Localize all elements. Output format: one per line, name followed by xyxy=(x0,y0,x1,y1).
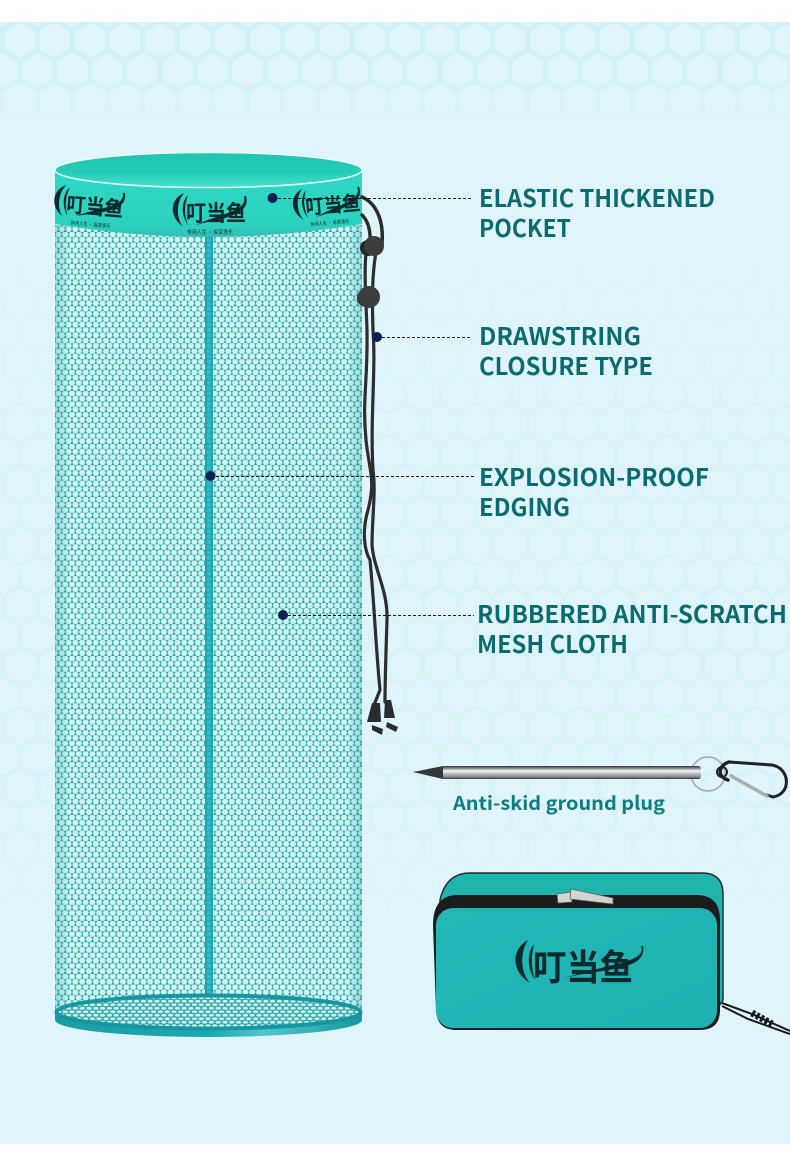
logo: left: 休闲人生 · 纵享渔乐 xyxy=(70,218,111,230)
cord end 1 xyxy=(367,703,383,735)
explosion-proof edging strip xyxy=(205,236,213,996)
carabiner xyxy=(717,762,786,797)
callout: rubbered anti-scratch mesh cloth xyxy=(278,595,787,660)
callout: elastic thickened pocket: ELASTIC THICKENED xyxy=(479,179,715,214)
logo: right: 叮当鱼 xyxy=(304,187,362,221)
elastic thickened band xyxy=(55,152,362,237)
callout: rubbered anti-scratch mesh cloth: MESH CLOTH xyxy=(477,625,628,660)
bottom hoop xyxy=(55,996,362,1037)
logo: center xyxy=(173,193,247,236)
callout: elastic thickened pocket xyxy=(268,179,715,244)
case front panel xyxy=(436,908,717,1028)
bottom white margin xyxy=(0,1144,790,1166)
cord toggle 1 xyxy=(360,236,384,256)
carrying case xyxy=(433,873,790,1034)
callout: drawstring closure type: DRAWSTRING xyxy=(479,317,641,352)
split ring xyxy=(691,757,725,791)
cord end 2 xyxy=(384,700,398,732)
callout: drawstring closure type: CLOSURE TYPE xyxy=(479,347,653,382)
zipper pull xyxy=(557,889,613,904)
mesh body xyxy=(55,225,362,1015)
logo: left xyxy=(52,184,126,231)
callout: drawstring closure type xyxy=(372,317,653,382)
logo: right xyxy=(292,184,363,230)
cord toggle 2 xyxy=(357,286,380,308)
logo: right: 休闲人生 · 纵享渔乐 xyxy=(310,218,349,228)
callout: elastic thickened pocket: POCKET xyxy=(479,209,571,244)
logo: center: 休闲人生 · 纵享渔乐 xyxy=(187,228,233,236)
background honeycomb pattern xyxy=(0,22,790,792)
callout: explosion-proof edging: EXPLOSION-PROOF xyxy=(479,458,709,493)
logo: center: 叮当鱼 xyxy=(186,196,246,228)
ground plug with ring and carabiner xyxy=(413,757,786,797)
callout: explosion-proof edging: EDGING xyxy=(479,488,570,523)
logo: left: 叮当鱼 xyxy=(65,189,125,224)
callout: explosion-proof edging xyxy=(206,458,709,523)
case back xyxy=(440,873,723,1020)
drawstring cord with toggles xyxy=(357,197,398,735)
metal spike xyxy=(413,766,701,779)
case strap xyxy=(722,1003,790,1034)
case logo: 叮当鱼 xyxy=(533,939,633,991)
mesh cylinder keep net xyxy=(52,152,363,1037)
callout: rubbered anti-scratch mesh cloth: RUBBERED ANTI-SCRATCH xyxy=(477,595,787,630)
ground plug label: Anti-skid ground plug xyxy=(452,789,666,816)
zipper band xyxy=(433,895,720,1030)
